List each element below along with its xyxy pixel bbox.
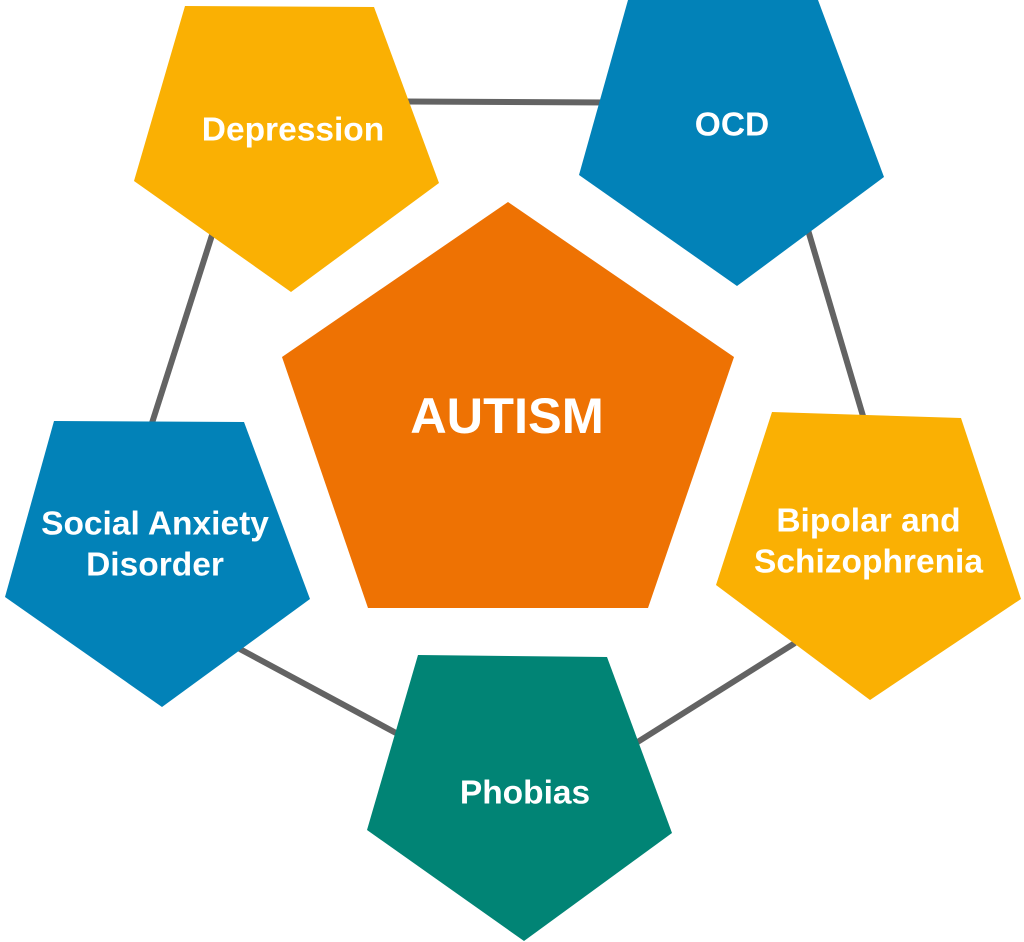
center pentagon: autism: AUTISM: [410, 387, 604, 444]
pentagon: phobias: [367, 655, 672, 941]
pentagon: depression: Depression: [202, 112, 384, 148]
pentagon: bipolar and schizophrenia: Bipolar and: [776, 502, 961, 540]
pentagon: depression: [134, 6, 439, 292]
connector lines: [152, 102, 863, 743]
center pentagon: autism: [282, 202, 734, 608]
pentagon: OCD: [579, 0, 884, 286]
pentagon: OCD: OCD: [695, 106, 769, 144]
pentagon: phobias: Phobias: [460, 774, 590, 812]
pentagon: social anxiety disorder: Social Anxiety: [41, 506, 269, 542]
pentagon: bipolar and schizophrenia: [716, 412, 1021, 700]
pentagon: bipolar and schizophrenia: Schizophrenia: [754, 544, 983, 580]
pentagon: social anxiety disorder: [5, 421, 310, 707]
pentagon: social anxiety disorder: Disorder: [86, 546, 224, 584]
